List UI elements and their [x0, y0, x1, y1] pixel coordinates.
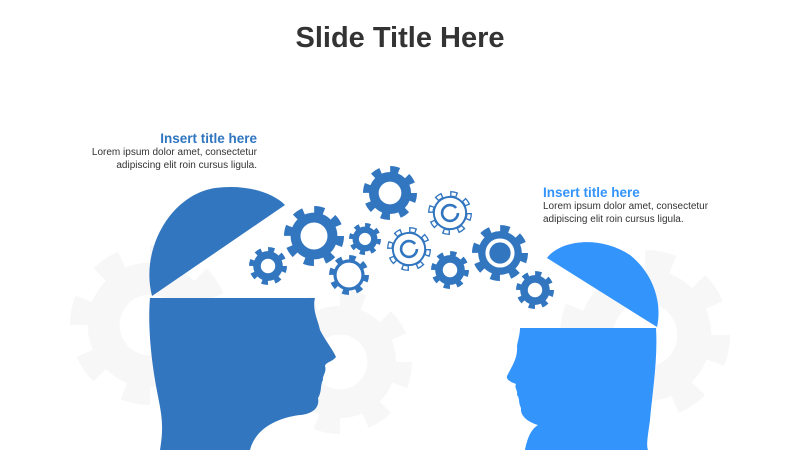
- text block: left: Lorem ipsum dolor amet, consectetur adipiscing elit roin cursus ligula.: [92, 147, 257, 170]
- text block: right: Lorem ipsum dolor amet, consectetur adipiscing elit roin cursus ligula.: [543, 201, 708, 224]
- text block: left: Insert title here: [160, 131, 257, 146]
- right head: [507, 242, 659, 450]
- left head: [149, 187, 336, 450]
- text block: left: [92, 131, 257, 170]
- text block: right: Insert title here: [543, 185, 640, 200]
- text block: right: [543, 185, 708, 224]
- background gears: [80, 255, 720, 425]
- title: Slide Title Here: [296, 22, 504, 54]
- gears: [251, 169, 552, 307]
